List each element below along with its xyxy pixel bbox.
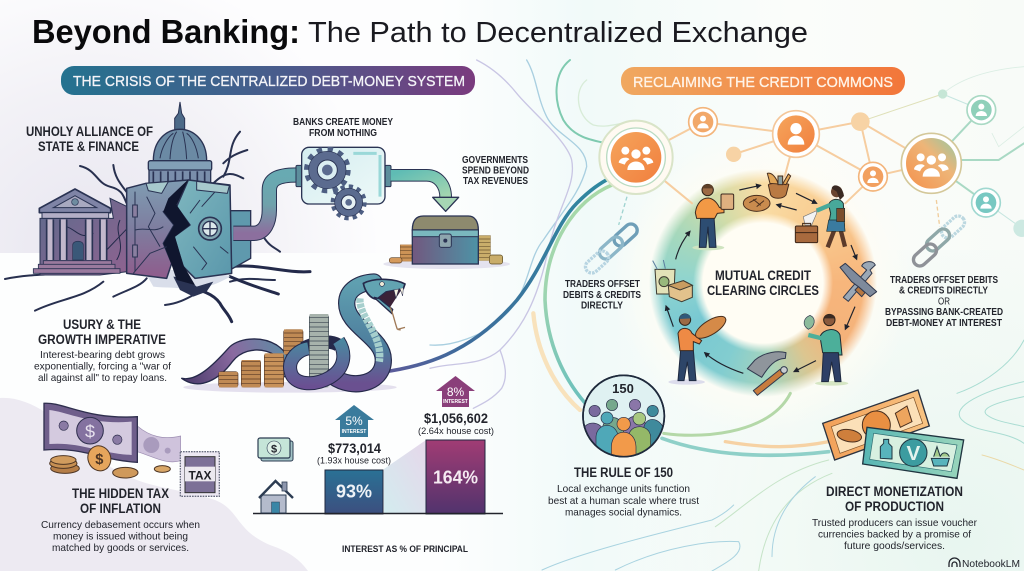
text: governments spend beyond tax revenues: TAX REVENUES — [463, 176, 528, 187]
capitol dome — [148, 102, 212, 185]
text: unholy alliance of state and finance: STATE & FINANCE — [38, 139, 139, 154]
illustration: serpent coiled round coin stacks — [182, 279, 405, 393]
heading pill: crisis of the centralized system: THE CRISIS OF THE CENTRALIZED DEBT-MONEY SYSTEM — [73, 73, 465, 90]
text: the hidden tax of inflation: Currency debasement occurs when — [41, 519, 200, 531]
badge: 8% interest: INTEREST — [443, 399, 468, 405]
text: traders offset right — [885, 275, 1003, 329]
text: traders offset right: & CREDITS DIRECTLY — [899, 286, 988, 296]
illustration: dollar notes, coins and tax stamp: TAX — [188, 468, 212, 482]
text: traders offset left: DEBITS & CREDITS — [563, 290, 641, 301]
ring: mutual credit circle band — [645, 165, 881, 401]
bar: 8% interest — [426, 440, 485, 514]
text: the rule of 150: best at a human scale where trust — [548, 495, 699, 507]
text: the rule of 150 — [548, 465, 699, 518]
text: the hidden tax of inflation: THE HIDDEN TAX — [72, 486, 169, 501]
title: Beyond Banking: — [32, 13, 300, 50]
text: direct monetization of production — [812, 484, 977, 552]
faded second note — [137, 426, 181, 462]
coil back — [303, 342, 338, 348]
icon: chain link right — [911, 213, 967, 269]
text: usury and the growth imperative — [34, 317, 171, 384]
text: traders offset right: OR — [938, 296, 950, 308]
pipe into money tank — [233, 175, 297, 233]
icon: banknote — [258, 438, 293, 461]
serpent neck — [333, 282, 383, 384]
text: the hidden tax of inflation: OF INFLATION — [80, 501, 161, 516]
trader: woman in teal with briefcase — [795, 185, 845, 247]
multiple 2.64x: (2.64x house cost) — [418, 426, 494, 436]
small node top left — [689, 108, 717, 136]
NotebookLM logo and wordmark: NotebookLM — [962, 558, 1020, 570]
text: traders offset right: DEBT-MONEY AT INTEREST — [886, 318, 1002, 329]
text: traders offset right: TRADERS OFFSET DEBITS — [890, 275, 998, 286]
text: usury and the growth imperative: USURY & THE — [63, 317, 141, 332]
tax stamp — [180, 452, 219, 496]
text: direct monetization of production: DIRECT MONETIZATION — [826, 484, 963, 499]
bar chart: interest as percent of principal — [253, 376, 503, 514]
heading pill: reclaiming the credit commons — [621, 67, 905, 95]
credit network of people — [583, 67, 1024, 276]
tall silver coin stack — [309, 314, 329, 387]
text: usury and the growth imperative: exponentially, forcing a "war of — [34, 360, 171, 372]
pale hole under the vault — [147, 270, 230, 290]
main blue strand — [383, 177, 612, 372]
value 164%: 164% — [433, 468, 478, 488]
icon: chain link left — [583, 221, 640, 276]
badge: 8% interest: 8% — [447, 385, 465, 399]
serpent head — [363, 279, 405, 330]
badge: 5% interest: 5% — [345, 414, 363, 428]
teal node lower right — [972, 188, 1000, 217]
value 93%: 93% — [336, 482, 372, 502]
vault wheel — [199, 217, 221, 240]
icon: house — [259, 481, 293, 513]
cycle arrows — [666, 185, 857, 373]
text: the rule of 150: THE RULE OF 150 — [574, 465, 673, 480]
bar: 5% interest — [325, 470, 383, 514]
tank with gears — [296, 147, 391, 218]
text: mutual credit clearing circles: CLEARING CIRCLES — [707, 283, 819, 298]
icon: voucher banknotes — [823, 390, 964, 478]
text: mutual credit clearing circles: MUTUAL CREDIT — [715, 268, 812, 283]
neck colour — [333, 282, 383, 384]
text: banks create money: FROM NOTHING — [309, 128, 377, 139]
illustration: dollar notes, coins and tax stamp: $ — [95, 452, 103, 468]
text: governments spend beyond tax revenues: SPEND BEYOND — [462, 166, 529, 176]
deep cracks — [187, 266, 310, 322]
fissure running out from the vault — [173, 277, 213, 297]
text: direct monetization of production: future goods/services. — [844, 540, 945, 552]
text: usury and the growth imperative: GROWTH IMPERATIVE — [38, 332, 166, 347]
pale junction dots — [726, 89, 1024, 237]
figures and goods around the ring — [653, 173, 877, 395]
coins — [50, 443, 170, 478]
medium node top centre — [773, 111, 819, 157]
teal node upper right — [967, 96, 996, 124]
green and teal strand round the ring — [545, 185, 612, 403]
total $1,056,602: $1,056,602 — [424, 411, 488, 426]
serpent tail — [182, 339, 291, 384]
trader: man in teal — [804, 314, 848, 386]
right door leaf — [174, 180, 232, 278]
flowing strands between the two halves — [430, 60, 633, 410]
text: traders offset left: DIRECTLY — [581, 300, 623, 312]
text: usury and the growth imperative: all against all" to repay loans. — [38, 372, 167, 384]
illustration: dollar notes, coins and tax stamp — [44, 403, 219, 496]
badge: 8% interest — [436, 376, 475, 407]
title: The Path to Decentralized Exchange — [308, 17, 808, 49]
treasure chest and coins — [383, 216, 510, 269]
hammer and chisel — [747, 352, 787, 395]
heading pill: reclaiming the credit commons: RECLAIMING THE CREDIT COMMONS — [633, 74, 893, 91]
heading pill: crisis of the centralized system — [61, 66, 475, 95]
badge: 5% interest: INTEREST — [342, 429, 366, 435]
trader: orange shirt with loaf — [668, 312, 729, 385]
text: direct monetization of production: OF PRODUCTION — [845, 499, 944, 514]
arrow pipe to treasure chest — [391, 175, 459, 211]
basket and bread — [743, 173, 791, 211]
text: direct monetization of production: Trusted producers can issue voucher — [812, 517, 977, 529]
coin stacks — [218, 329, 303, 387]
text: the hidden tax of inflation: money is issued without being — [53, 530, 188, 542]
text: usury and the growth imperative: Interest-bearing debt grows — [40, 349, 165, 361]
text: unholy alliance of state and finance — [26, 124, 153, 154]
text: banks create money — [293, 117, 393, 139]
crossed wrench and tools — [840, 262, 877, 301]
large community node right — [901, 133, 961, 193]
small node right of centre — [859, 162, 887, 191]
multiple 1.93x: (1.93x house cost) — [317, 456, 391, 466]
orange voucher — [823, 390, 929, 460]
pipe fill — [233, 175, 297, 233]
text: direct monetization of production: currencies backed by a promise of — [818, 528, 971, 540]
lower sweeping strands — [542, 340, 1024, 571]
trader: orange shirt with bag — [692, 184, 734, 250]
large community node left — [599, 121, 673, 194]
dashed ties to chain links — [619, 197, 627, 225]
text: banks create money: BANKS CREATE MONEY — [293, 117, 393, 128]
note panel — [49, 410, 132, 455]
total $773,014: $773,014 — [328, 441, 381, 456]
ground cracks — [5, 132, 280, 311]
icon: rule of 150 crowd — [581, 375, 665, 458]
coil front — [290, 341, 343, 383]
coil colour — [290, 341, 343, 383]
illustration: capitol, bank and cracked vault — [5, 102, 310, 322]
belly scales — [360, 298, 380, 362]
central fissure — [163, 179, 195, 285]
text: the rule of 150: Local exchange units function — [557, 483, 690, 495]
text: traders offset left — [563, 279, 641, 312]
label: 150: 150 — [612, 381, 634, 396]
text: governments spend beyond tax revenues: GOVERNMENTS — [462, 155, 528, 166]
illustration: dollar notes, coins and tax stamp: $ — [85, 421, 95, 441]
text: the hidden tax of inflation: matched by goods or services. — [52, 542, 189, 554]
icon: banknote: $ — [271, 444, 277, 456]
stone block behind vault and vault doors — [127, 179, 251, 285]
text: traders offset right: BYPASSING BANK-CREATED — [885, 307, 1003, 318]
wedge between bars — [384, 440, 426, 513]
main dollar note — [44, 403, 137, 462]
left door leaf — [127, 180, 188, 278]
badge: 5% interest — [335, 405, 374, 437]
storage box and jar — [653, 260, 692, 302]
chart caption: INTEREST AS % OF PRINCIPAL — [342, 544, 468, 555]
text: unholy alliance of state and finance: UNHOLY ALLIANCE OF — [26, 124, 153, 139]
title — [32, 13, 808, 50]
text: the rule of 150: manages social dynamics. — [565, 506, 682, 518]
text: traders offset left: TRADERS OFFSET — [565, 279, 640, 290]
teal voucher: V — [906, 442, 920, 465]
baseline — [253, 512, 503, 514]
network links — [636, 67, 1024, 228]
text: the hidden tax of inflation — [41, 486, 200, 554]
text: governments spend beyond tax revenues — [462, 155, 529, 187]
classical bank temple — [33, 189, 127, 275]
teal voucher — [863, 427, 964, 478]
text: mutual credit clearing circles — [707, 268, 819, 298]
